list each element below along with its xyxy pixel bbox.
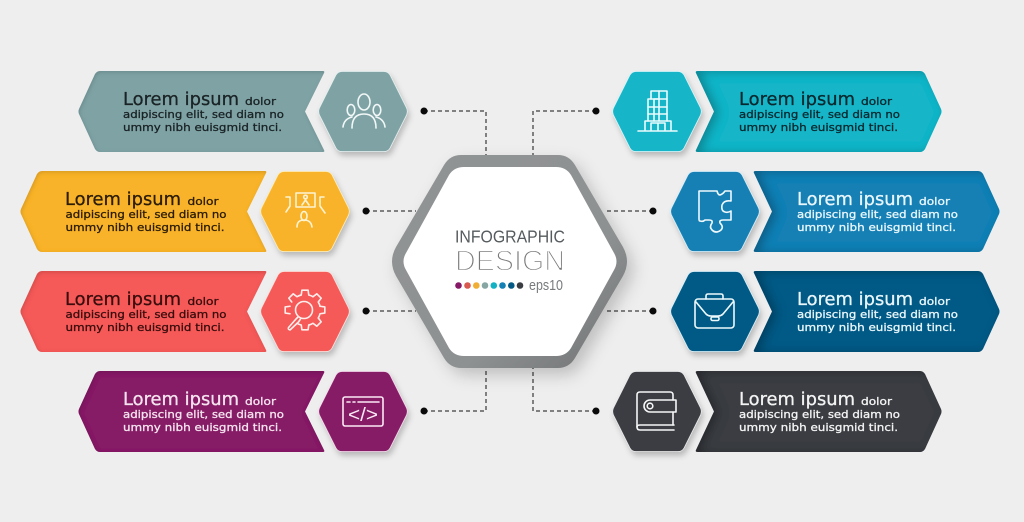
banner text: ummy nibh euisgmid tinci. <box>797 222 956 234</box>
panel: right 3 navy <box>671 271 1000 352</box>
banner text: adipiscing elit, sed diam no <box>739 409 900 421</box>
banner text: dolor <box>919 296 951 308</box>
panel: right 4 charcoal <box>613 371 942 452</box>
icon: briefcase <box>695 294 734 328</box>
banner text: Lorem ipsum <box>65 189 181 210</box>
banner text: ummy nibh euisgmid tinci. <box>739 122 898 134</box>
icon: building <box>638 91 677 131</box>
banner text: ummy nibh euisgmid tinci. <box>66 222 224 234</box>
banner text: adipiscing elit, sed diam no <box>123 409 284 421</box>
icon: code window: </> <box>348 405 378 426</box>
banner text: ummy nibh euisgmid tinci. <box>797 322 956 334</box>
icon: presentation <box>286 193 325 227</box>
banner text: ummy nibh euisgmid tinci. <box>123 422 282 434</box>
banner text: adipiscing elit, sed diam no <box>739 109 900 121</box>
banner text: adipiscing elit, sed diam no <box>66 209 226 221</box>
hexagon badge <box>261 272 349 352</box>
banner text: dolor <box>245 96 277 108</box>
color dots <box>455 282 523 289</box>
banner text: dolor <box>188 296 219 308</box>
icon: code window <box>343 397 383 426</box>
banner <box>20 171 266 252</box>
icon: gear and magnifier <box>285 290 325 330</box>
hexagon badge <box>671 272 759 352</box>
banner text: dolor <box>861 396 893 408</box>
banner <box>20 271 266 352</box>
banner text <box>123 389 284 434</box>
hexagon ring <box>392 155 627 368</box>
center title <box>455 227 565 294</box>
banner text <box>65 289 226 334</box>
center title: DESIGN <box>455 246 565 278</box>
icon: wallet <box>637 392 676 430</box>
icon: people <box>343 94 385 128</box>
banner text: adipiscing elit, sed diam no <box>797 309 958 321</box>
banner <box>78 71 324 152</box>
panel: right 2 blue <box>671 171 1000 252</box>
banner <box>754 171 1000 252</box>
banner text: Lorem ipsum <box>123 89 239 110</box>
hexagon badge <box>319 72 407 152</box>
central hexagon <box>392 155 627 368</box>
panel: left 3 red <box>20 271 349 352</box>
banner text: Lorem ipsum <box>739 389 855 410</box>
banner text: adipiscing elit, sed diam no <box>797 209 958 221</box>
banner text: adipiscing elit, sed diam no <box>66 309 226 321</box>
banner text: ummy nibh euisgmid tinci. <box>66 322 224 334</box>
banner text <box>797 289 958 334</box>
panel: left 2 yellow <box>20 171 349 252</box>
hexagon badge <box>319 372 407 452</box>
connector lines <box>362 108 656 414</box>
banner text: Lorem ipsum <box>797 189 913 210</box>
banner text: dolor <box>919 196 951 208</box>
banner text <box>797 189 958 234</box>
banner text: Lorem ipsum <box>123 389 239 410</box>
center title: INFOGRAPHIC <box>455 227 565 247</box>
center title: eps10 <box>529 277 563 294</box>
hexagon badge <box>613 372 701 452</box>
hexagon badge <box>671 172 759 252</box>
banner text <box>739 89 900 134</box>
banner text: dolor <box>245 396 277 408</box>
panel: left 4 purple <box>78 371 407 452</box>
banner text <box>65 189 226 234</box>
banner text <box>739 389 900 434</box>
banner <box>696 371 942 452</box>
banner text <box>123 89 284 134</box>
banner <box>78 371 324 452</box>
banner text: adipiscing elit, sed diam no <box>123 109 284 121</box>
banner text: ummy nibh euisgmid tinci. <box>739 422 898 434</box>
hexagon badge <box>261 172 349 252</box>
panel: right 1 cyan <box>613 71 942 152</box>
icon: puzzle piece <box>699 191 731 232</box>
banner text: Lorem ipsum <box>797 289 913 310</box>
banner <box>696 71 942 152</box>
banner text: Lorem ipsum <box>65 289 181 310</box>
hexagon badge <box>613 72 701 152</box>
banner text: dolor <box>188 196 219 208</box>
hexagon inner face <box>404 167 616 356</box>
banner text: dolor <box>861 96 893 108</box>
panel: left 1 gray-teal <box>78 71 407 152</box>
banner <box>754 271 1000 352</box>
banner text: Lorem ipsum <box>739 89 855 110</box>
banner text: ummy nibh euisgmid tinci. <box>123 122 282 134</box>
